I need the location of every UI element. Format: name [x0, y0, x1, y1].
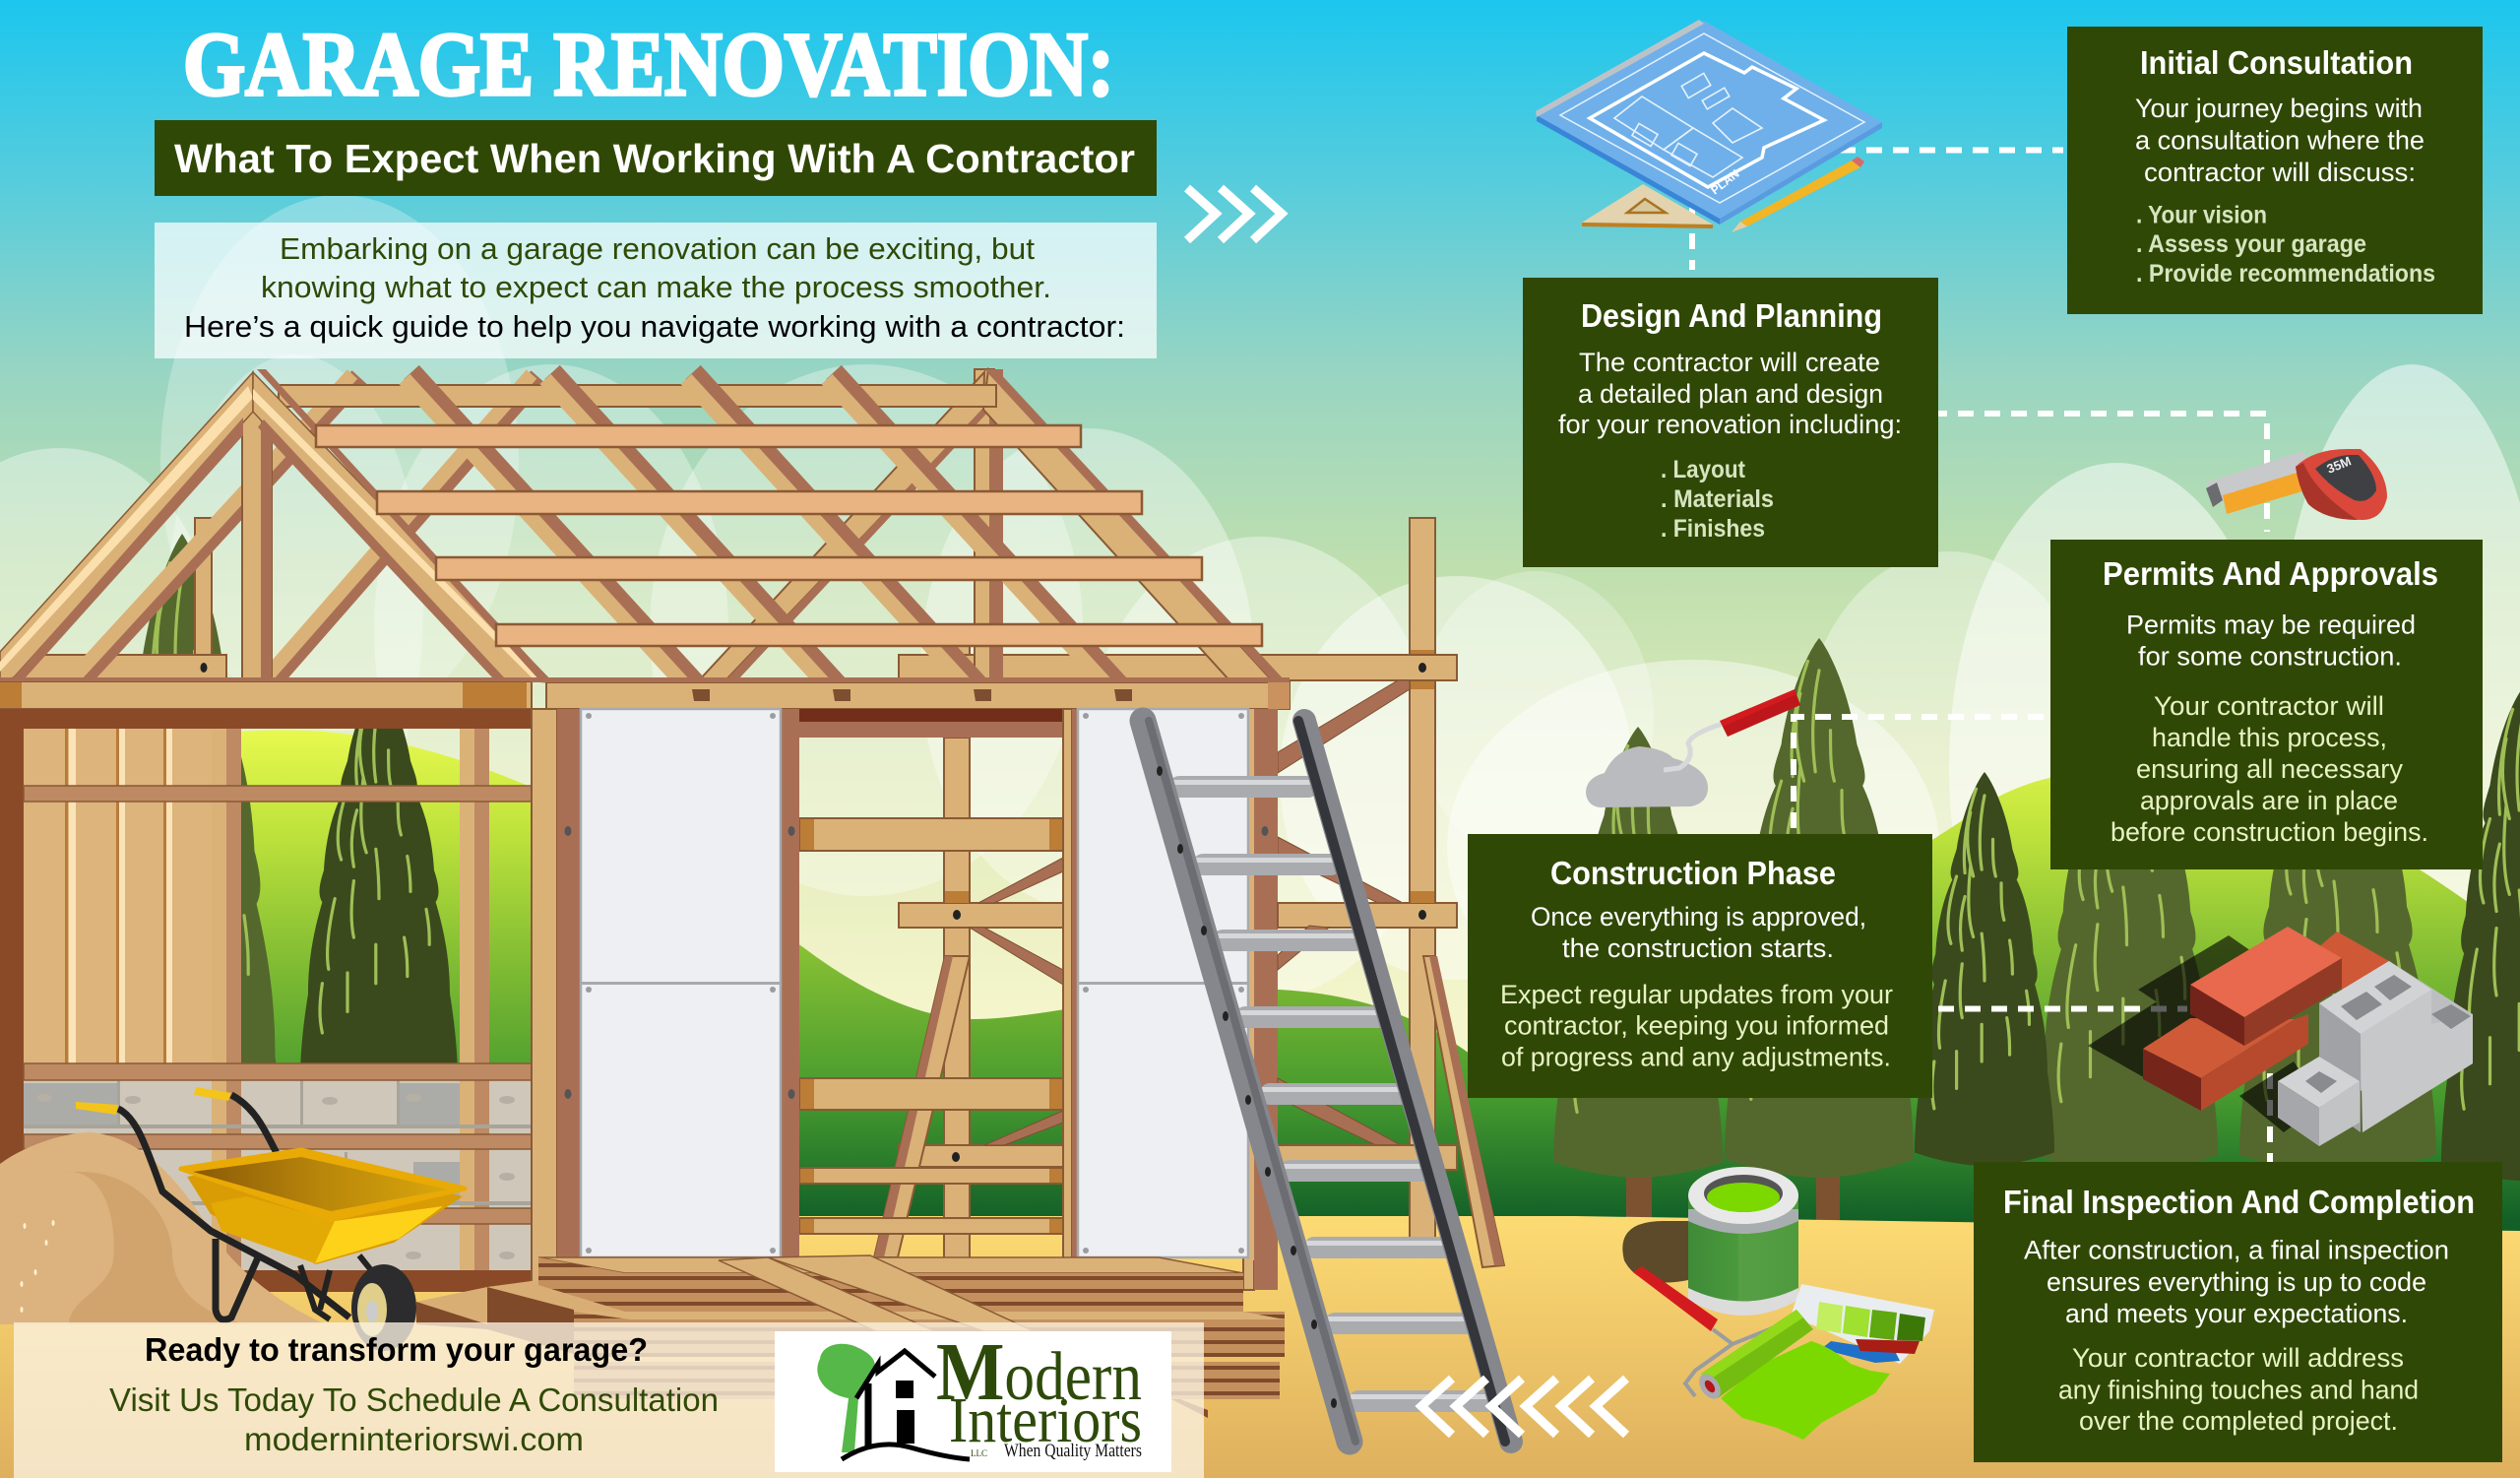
logo: Modern Interiors: Modern [936, 1326, 1142, 1418]
pine trees [79, 534, 2520, 1221]
logo: Modern Interiors: Interiors [949, 1384, 1142, 1456]
drywall panels [581, 709, 1248, 1257]
panel: initial consultation [2067, 27, 2483, 314]
icon: blueprint with pencil and set square [1536, 20, 1882, 232]
garage frame [0, 369, 1504, 1310]
footer call to action: moderninteriorswi.com [244, 1421, 584, 1457]
subtitle banner: What To Expect When Working With A Contractor [174, 136, 1135, 181]
intro text block: knowing what to expect can make the process smoother. [261, 270, 1051, 304]
panel: permits and approvals: approvals are in place [2140, 786, 2398, 815]
sand pile [0, 1132, 325, 1324]
stone wall [24, 1080, 532, 1270]
panel: final inspection and completion [1974, 1162, 2502, 1462]
logo: Modern Interiors: When Quality Matters [1004, 1441, 1142, 1461]
purlins [316, 425, 1262, 646]
panel: final inspection and completion: Final Inspection And Completion [2003, 1184, 2475, 1220]
panel: final inspection and completion: any finishing touches and hand [2058, 1375, 2419, 1404]
panel: design and planning [1523, 278, 1938, 567]
icon: tape measure: 35M [2325, 453, 2354, 477]
intro text block: Here’s a quick guide to help you navigate working with a contractor: [184, 309, 1125, 344]
panel: initial consultation: contractor will discuss: [2144, 158, 2416, 187]
panel: final inspection and completion: ensures everything is up to code [2047, 1267, 2426, 1297]
chevrons pointing left, bottom [1421, 1379, 1626, 1435]
panel: construction phase: Construction Phase [1550, 855, 1836, 891]
panel: permits and approvals: handle this process, [2152, 723, 2387, 752]
dashed connectors [1692, 150, 2270, 1162]
icon: house [842, 1351, 970, 1459]
front gable truss [0, 369, 552, 683]
centre door opening [799, 709, 1063, 1259]
clouds [0, 195, 2520, 1093]
footer call to action [14, 1322, 1204, 1478]
scaffold posts and beams behind roof [19, 518, 1457, 1256]
panel: permits and approvals: Your contractor will [2154, 691, 2384, 721]
background hills [0, 731, 2520, 1241]
panel: construction phase: the construction starts. [1562, 933, 1834, 963]
right scaffold [1278, 891, 1504, 1267]
top purlin [279, 385, 996, 407]
panel: permits and approvals: ensuring all necessary [2136, 754, 2403, 784]
panel: initial consultation: . Your vision [2136, 201, 2267, 228]
panel: initial consultation: Initial Consultation [2140, 44, 2413, 81]
footer call to action: Visit Us Today To Schedule A Consultation [109, 1382, 719, 1418]
footer call to action: Ready to transform your garage? [145, 1331, 648, 1368]
icon: tape measure [2206, 449, 2387, 520]
tie beams [0, 677, 1290, 709]
icon: trowel [1586, 689, 1800, 807]
panel: design and planning: . Layout [1661, 456, 1746, 483]
panel: final inspection and completion: and meets your expectations. [2065, 1299, 2408, 1328]
rafter feet over beam [692, 689, 1132, 701]
panel: design and planning: Design And Planning [1581, 297, 1882, 334]
back rafters [77, 369, 1285, 682]
panel: initial consultation: Your journey begins with [2135, 94, 2423, 123]
posts [532, 709, 1278, 1290]
panel: design and planning: . Finishes [1661, 515, 1765, 543]
subtitle banner [155, 120, 1157, 196]
panel: construction phase: Expect regular updates from your [1500, 980, 1893, 1009]
panel: final inspection and completion: Your contractor will address [2072, 1343, 2404, 1373]
lumber stacks [416, 1255, 1285, 1418]
panel: initial consultation: a consultation where the [2135, 126, 2425, 156]
icon: tree [817, 1344, 875, 1452]
chevrons pointing right, top [1187, 188, 1282, 240]
panel: design and planning: The contractor will create [1579, 348, 1880, 377]
wheelbarrow [76, 1087, 465, 1351]
panel: final inspection and completion: over the completed project. [2079, 1406, 2398, 1436]
title: GARAGE RENOVATION: [183, 14, 1114, 114]
logo: Modern Interiors [775, 1326, 1171, 1472]
panel: permits and approvals [2050, 540, 2483, 869]
panel: design and planning: a detailed plan and design [1578, 379, 1883, 409]
icon: blueprint with pencil and set square: PLAN [1708, 166, 1742, 197]
panel: construction phase: Once everything is approved, [1531, 902, 1866, 932]
panel: permits and approvals: Permits And Approvals [2103, 555, 2438, 592]
icon: paint can, roller and colour swatches [1622, 1167, 1934, 1440]
panel: construction phase [1468, 834, 1932, 1098]
icon: bricks and cinder blocks [2088, 927, 2473, 1146]
intro text block: Embarking on a garage renovation can be exciting, but [280, 231, 1035, 266]
panel: permits and approvals: for some construction. [2138, 642, 2402, 672]
panel: design and planning: . Materials [1661, 485, 1774, 513]
ground [0, 1216, 2520, 1478]
panel: design and planning: for your renovation including: [1558, 410, 1902, 439]
panel: initial consultation: . Provide recommendations [2136, 260, 2435, 288]
panel: permits and approvals: before construction begins. [2110, 817, 2428, 847]
intro text block [155, 223, 1157, 358]
panel: construction phase: contractor, keeping you informed [1504, 1010, 1889, 1040]
logo: Modern Interiors: LLC [971, 1448, 987, 1458]
panel: final inspection and completion: After construction, a final inspection [2024, 1235, 2449, 1264]
panel: initial consultation: . Assess your garage [2136, 230, 2366, 258]
panel: construction phase: of progress and any adjustments. [1501, 1042, 1891, 1071]
sloped rafters [405, 372, 1132, 703]
ladder [1143, 721, 1511, 1442]
panel: permits and approvals: Permits may be required [2126, 610, 2416, 640]
left wall [0, 709, 532, 1310]
